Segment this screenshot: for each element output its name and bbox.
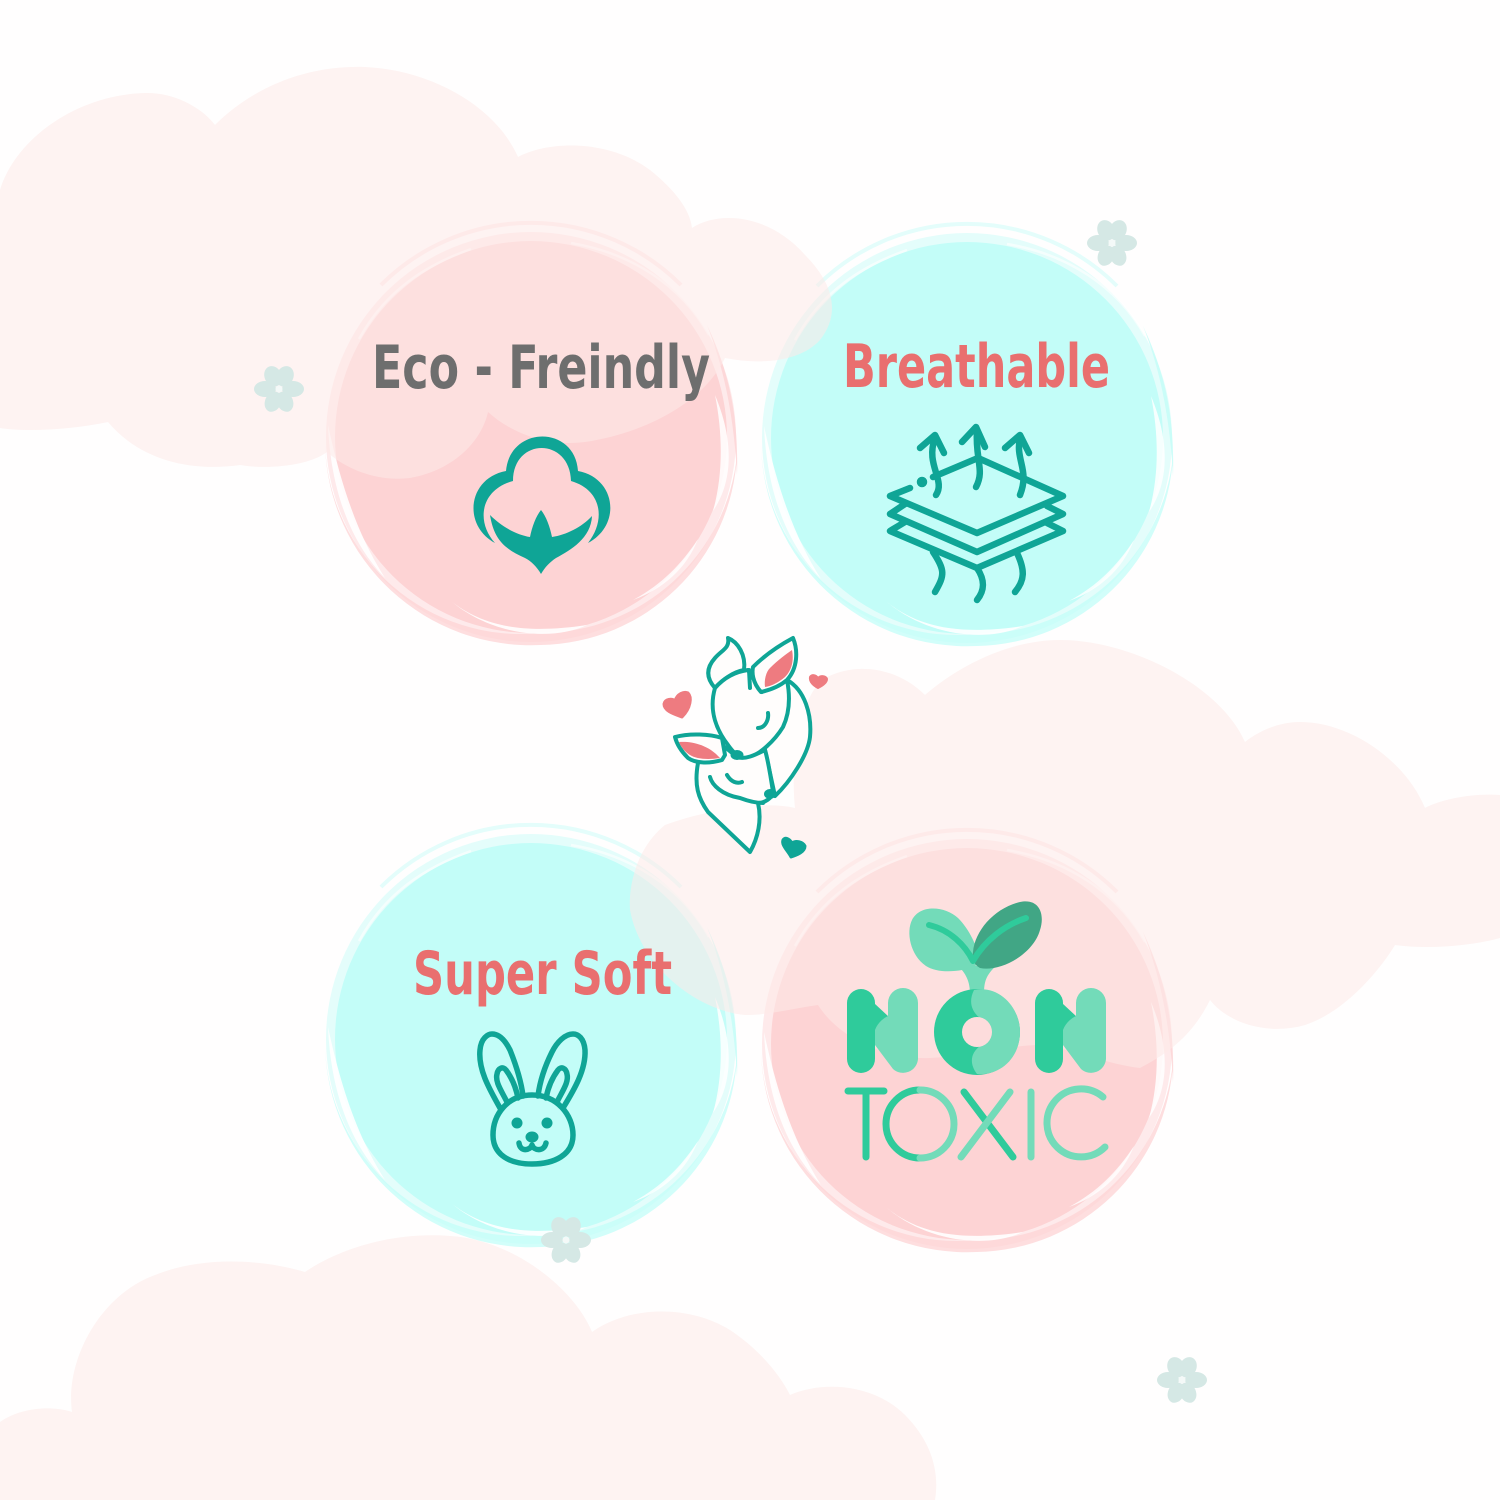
panel: non toxic circle <box>761 830 1173 1252</box>
heart: teal <box>783 838 805 857</box>
flower: below super soft <box>541 1214 591 1266</box>
sprout <box>909 901 1042 994</box>
flower: bottom right <box>1157 1354 1207 1406</box>
flower: left of eco-friendly <box>254 363 304 415</box>
panel: super soft circle <box>325 825 737 1247</box>
flower: top right of breathable <box>1087 217 1137 269</box>
letters TOXIC <box>848 1089 1105 1158</box>
panel: breathable circle <box>761 224 1173 646</box>
icon: non toxic logo <box>847 901 1106 1158</box>
heart: right pink <box>810 675 827 688</box>
icon: bunny <box>480 1034 585 1164</box>
cloud: middle right <box>630 640 1500 1068</box>
letters NON <box>847 988 1106 1075</box>
illustration: deer pair with hearts <box>664 638 827 857</box>
heading: Eco - Freindly: Eco - Freindly <box>372 333 710 403</box>
icon: breathable fabric layers <box>890 427 1063 600</box>
cloud: bottom left <box>0 1235 936 1500</box>
heading: Breathable: Breathable <box>843 332 1110 402</box>
panel: eco-friendly circle <box>325 223 737 645</box>
heart: left pink <box>664 692 690 717</box>
icon: cotton boll <box>473 436 610 574</box>
upper deer <box>708 638 810 796</box>
cloud: top left <box>0 67 832 479</box>
noses <box>730 750 744 760</box>
heading: Super Soft: Super Soft <box>413 939 672 1009</box>
lower deer <box>675 734 773 852</box>
